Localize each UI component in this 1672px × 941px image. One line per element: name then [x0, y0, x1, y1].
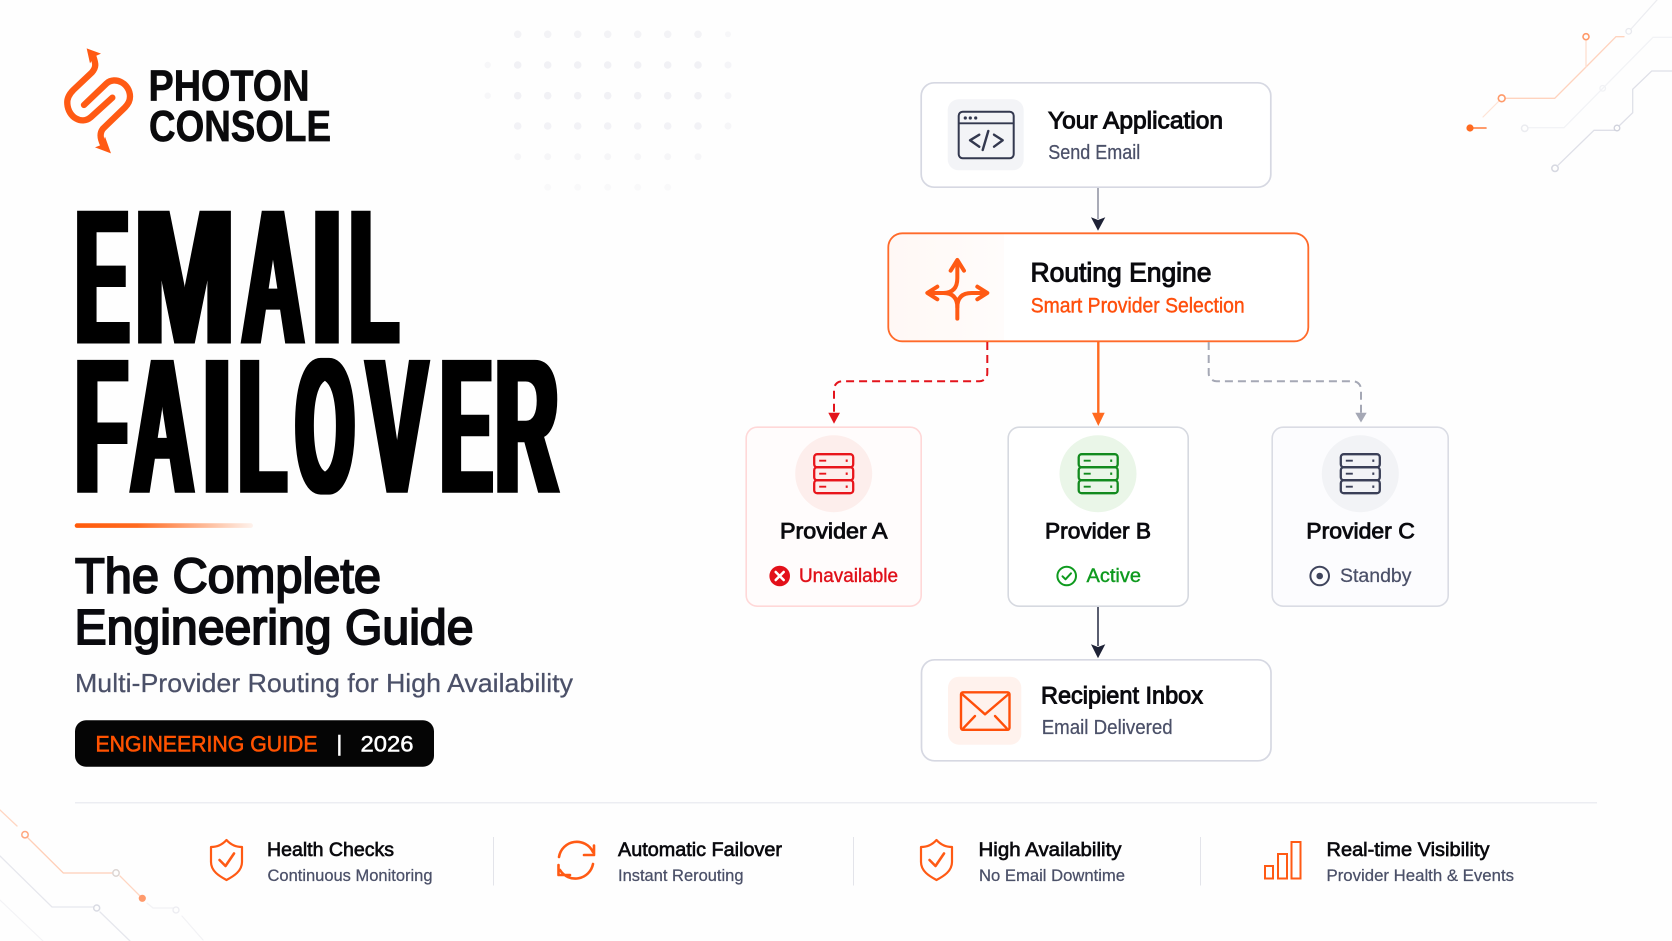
card text: Your Application — [1048, 107, 1223, 134]
icon: server red — [795, 435, 872, 512]
icon: shield — [211, 840, 242, 880]
title: E — [441, 318, 492, 534]
feature text: Real-time Visibility — [1326, 839, 1490, 861]
decorative circuit top right — [1470, 0, 1672, 172]
feature: high availability: No Email Downtime — [979, 867, 1125, 885]
status: active: Active — [1086, 565, 1141, 587]
feature: health checks — [211, 839, 432, 885]
heading: the complete engineering guide: The Complete — [75, 550, 381, 604]
title: A — [242, 168, 304, 384]
connector: dashed to provider A — [828, 342, 987, 424]
badge: 2026 — [360, 732, 414, 757]
title: L — [350, 168, 398, 384]
icon: shield — [921, 840, 952, 880]
icon: bar chart — [1265, 842, 1300, 878]
card: recipient inbox — [922, 660, 1271, 761]
card: provider B — [1008, 427, 1188, 606]
decorative dot grid — [484, 30, 732, 191]
badge: ENGINEERING GUIDE — [96, 732, 318, 757]
title: M — [134, 168, 235, 384]
feature: real-time visibility — [1265, 839, 1514, 885]
card: your application: Send Email — [1048, 142, 1140, 164]
heading: the complete engineering guide: Engineering Guide — [74, 601, 474, 655]
feature text: High Availability — [978, 839, 1122, 861]
decorative node bottom left — [139, 895, 146, 902]
card: recipient inbox: Email Delivered — [1042, 717, 1173, 739]
title: A — [131, 318, 194, 534]
card: routing engine — [888, 233, 1308, 341]
separator — [1200, 837, 1201, 886]
status: standby: Standby — [1340, 565, 1412, 587]
decorative node top right — [1466, 124, 1474, 132]
card: provider C — [1272, 427, 1448, 606]
provider name: Provider A — [780, 518, 888, 543]
icon: envelope — [948, 677, 1021, 745]
card: provider A — [746, 427, 921, 606]
title: E — [76, 168, 129, 384]
logo text: CONSOLE — [149, 103, 331, 151]
connector: app to routing — [1091, 188, 1105, 231]
icon: refresh arrows — [558, 842, 594, 879]
logo — [67, 48, 331, 153]
feature: automatic failover: Instant Rerouting — [618, 867, 744, 885]
feature text: Health Checks — [267, 839, 394, 861]
icon: logo serpentine arrows — [67, 48, 130, 153]
card text: Recipient Inbox — [1041, 682, 1203, 709]
title: F — [76, 318, 128, 534]
feature: health checks: Continuous Monitoring — [268, 867, 432, 885]
status: unavailable: Unavailable — [799, 565, 898, 587]
separator — [493, 837, 494, 886]
card text: Routing Engine — [1030, 258, 1212, 288]
subtitle: Multi-Provider Routing for High Availability — [75, 668, 573, 698]
icon: server green — [1060, 435, 1136, 512]
logo text: PHOTON — [148, 63, 310, 111]
feature: high availability — [921, 839, 1125, 885]
accent rule — [75, 523, 253, 528]
decorative circuit bottom left — [0, 810, 203, 941]
status: active — [1057, 565, 1141, 587]
badge: | — [336, 731, 342, 756]
badge — [75, 720, 434, 767]
title: L — [239, 318, 286, 534]
separator — [853, 837, 854, 886]
title: O — [296, 318, 354, 534]
title — [76, 168, 558, 534]
title: I — [312, 168, 342, 384]
title: I — [203, 318, 231, 534]
icon: routing arrows — [927, 260, 987, 319]
feature text: Automatic Failover — [618, 839, 783, 861]
connector: active to provider B — [1092, 342, 1105, 426]
footer divider — [75, 802, 1597, 804]
feature: real-time visibility: Provider Health & Events — [1326, 867, 1514, 885]
icon: code window — [948, 99, 1024, 170]
feature: automatic failover — [558, 839, 783, 885]
connector: provider B to inbox — [1091, 607, 1105, 658]
provider name: Provider B — [1045, 518, 1151, 543]
title: V — [367, 318, 427, 534]
provider name: Provider C — [1306, 518, 1415, 543]
connector: dashed to provider C — [1209, 342, 1367, 422]
icon: server grey — [1322, 435, 1399, 512]
card: routing engine: Smart Provider Selection — [1031, 295, 1245, 318]
card: your application — [921, 83, 1271, 187]
text: R — [496, 318, 558, 534]
